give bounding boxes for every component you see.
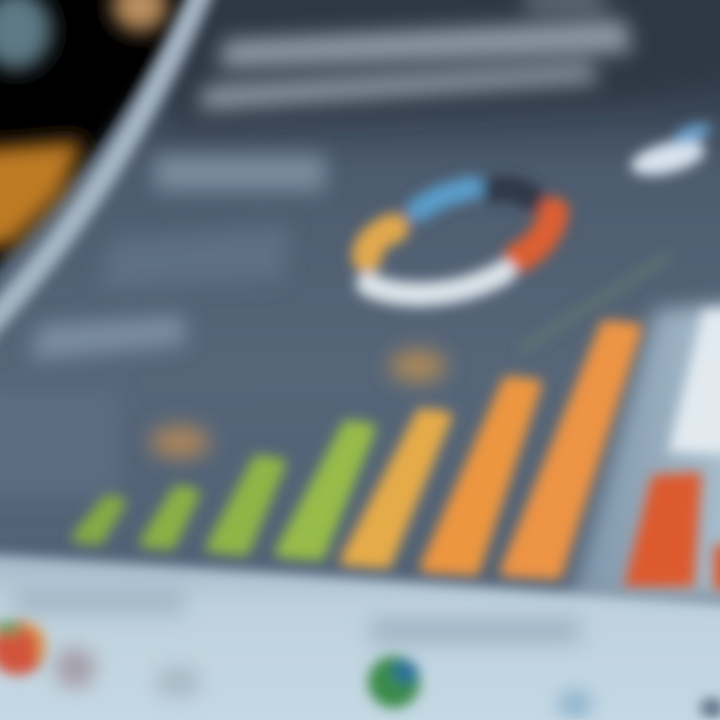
left body lines bbox=[0, 390, 120, 500]
yellow segment bbox=[367, 228, 394, 258]
blue part bbox=[670, 120, 714, 148]
chart trend line bbox=[520, 255, 670, 350]
icon: dark corner mark bbox=[700, 698, 720, 718]
red bar 1 bbox=[624, 472, 702, 587]
pie red bbox=[0, 621, 46, 675]
red bars bbox=[624, 472, 720, 590]
title line two bbox=[198, 64, 600, 110]
text block: blurred subheading bbox=[100, 155, 325, 290]
title line one bbox=[218, 20, 632, 68]
heading: blurred title text bbox=[198, 0, 632, 110]
icon: small muted pie bbox=[55, 648, 95, 688]
text block: bottom panel heading left bbox=[15, 590, 185, 614]
dark corner base bbox=[0, 0, 225, 310]
blue segment bbox=[418, 188, 472, 210]
label one bbox=[150, 425, 210, 459]
text block: blurred left label bbox=[0, 315, 185, 500]
subheading bbox=[155, 155, 325, 191]
green bar 2 bbox=[146, 491, 194, 544]
curved pale band bbox=[0, 0, 210, 345]
green bar 3 bbox=[212, 461, 280, 550]
donut chart bbox=[367, 188, 554, 294]
panel: white card at right bbox=[668, 308, 720, 456]
pale blob at top left bbox=[0, 0, 52, 70]
panel: dark photo corner bbox=[0, 0, 225, 345]
red bar 2 bbox=[714, 545, 720, 590]
white segment bbox=[368, 272, 504, 294]
pie green top bbox=[0, 621, 22, 635]
label two bbox=[390, 349, 446, 383]
bar value labels bbox=[150, 349, 446, 459]
panel: bottom light panel base bbox=[0, 590, 720, 720]
icon: faint mark bbox=[154, 666, 202, 698]
body lines bbox=[100, 225, 290, 290]
panel: bottom light panel bbox=[0, 552, 720, 690]
title top fragment bbox=[525, 0, 605, 12]
orange bar 7 bbox=[506, 326, 636, 574]
white part bbox=[627, 134, 709, 182]
dark segment bbox=[495, 188, 532, 198]
bar chart bbox=[78, 326, 636, 574]
icon: top right cloud bbox=[627, 120, 714, 182]
icon: left pie chart bbox=[0, 621, 46, 675]
icon: green and blue pie bbox=[368, 656, 420, 708]
tan object at top bbox=[112, 0, 168, 32]
red segment bbox=[518, 212, 554, 258]
yellow bar 5 bbox=[346, 414, 446, 563]
orange object bbox=[0, 140, 84, 250]
pie orange edge bbox=[25, 625, 42, 660]
panel: dark header band bbox=[170, 0, 720, 125]
green bar 1 bbox=[78, 501, 120, 539]
left label bbox=[30, 315, 185, 360]
pie green bbox=[368, 656, 420, 708]
green bar 4 bbox=[281, 426, 370, 555]
icon: small blue mark bbox=[559, 692, 591, 716]
text block: bottom panel heading right bbox=[370, 618, 580, 644]
panel: pale blue strip behind right bars bbox=[570, 300, 720, 600]
orange bar 6 bbox=[426, 382, 536, 570]
pie blue bbox=[392, 660, 418, 684]
